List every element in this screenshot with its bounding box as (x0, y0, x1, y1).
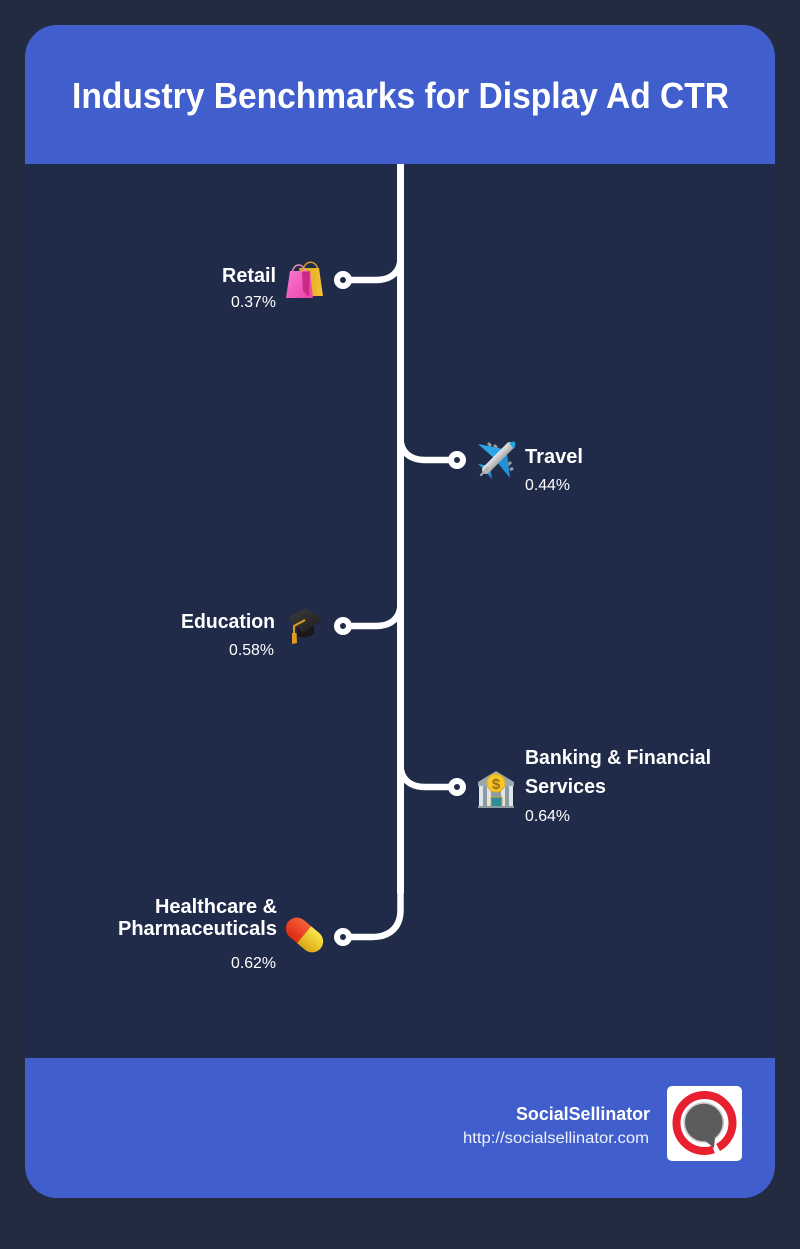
label: healthcare: Healthcare & (155, 896, 277, 918)
label: healthcare: 0.62% (231, 955, 276, 972)
footer brand text: SocialSellinator (516, 1104, 650, 1124)
node: travel (451, 454, 463, 466)
icon: shopping bags (286, 262, 323, 298)
label: education: 0.58% (229, 642, 274, 659)
node: healthcare (337, 931, 349, 943)
label: banking: Services (525, 776, 606, 798)
label: retail: Retail (222, 265, 276, 287)
label: education: Education (181, 611, 275, 633)
node: banking (451, 781, 463, 793)
label: banking (525, 747, 711, 825)
footer brand text: http://socialsellinator.com (463, 1130, 649, 1147)
icon: bank: $ (492, 776, 501, 793)
icon: bank (478, 771, 514, 808)
label: banking: 0.64% (525, 808, 570, 825)
icon: pill (281, 913, 328, 957)
label: travel: 0.44% (525, 477, 570, 494)
label: healthcare: Pharmaceuticals (118, 918, 277, 940)
label: banking: Banking & Financial (525, 747, 711, 769)
footer brand text (463, 1104, 650, 1147)
node: education (337, 620, 349, 632)
label: travel (525, 446, 583, 494)
logo (667, 1086, 742, 1161)
icon: graduation cap (288, 608, 323, 644)
header band (25, 25, 775, 164)
label: education (181, 611, 275, 659)
label: retail: 0.37% (231, 294, 276, 311)
footer band (25, 1058, 775, 1198)
label: travel: Travel (525, 446, 583, 468)
timeline trunk and connectors (343, 164, 457, 937)
icon: airplane (478, 442, 515, 479)
label: retail (222, 265, 276, 311)
label: healthcare (118, 896, 277, 972)
title: Industry Benchmarks for Display Ad CTR (72, 75, 729, 116)
node: retail (337, 274, 349, 286)
